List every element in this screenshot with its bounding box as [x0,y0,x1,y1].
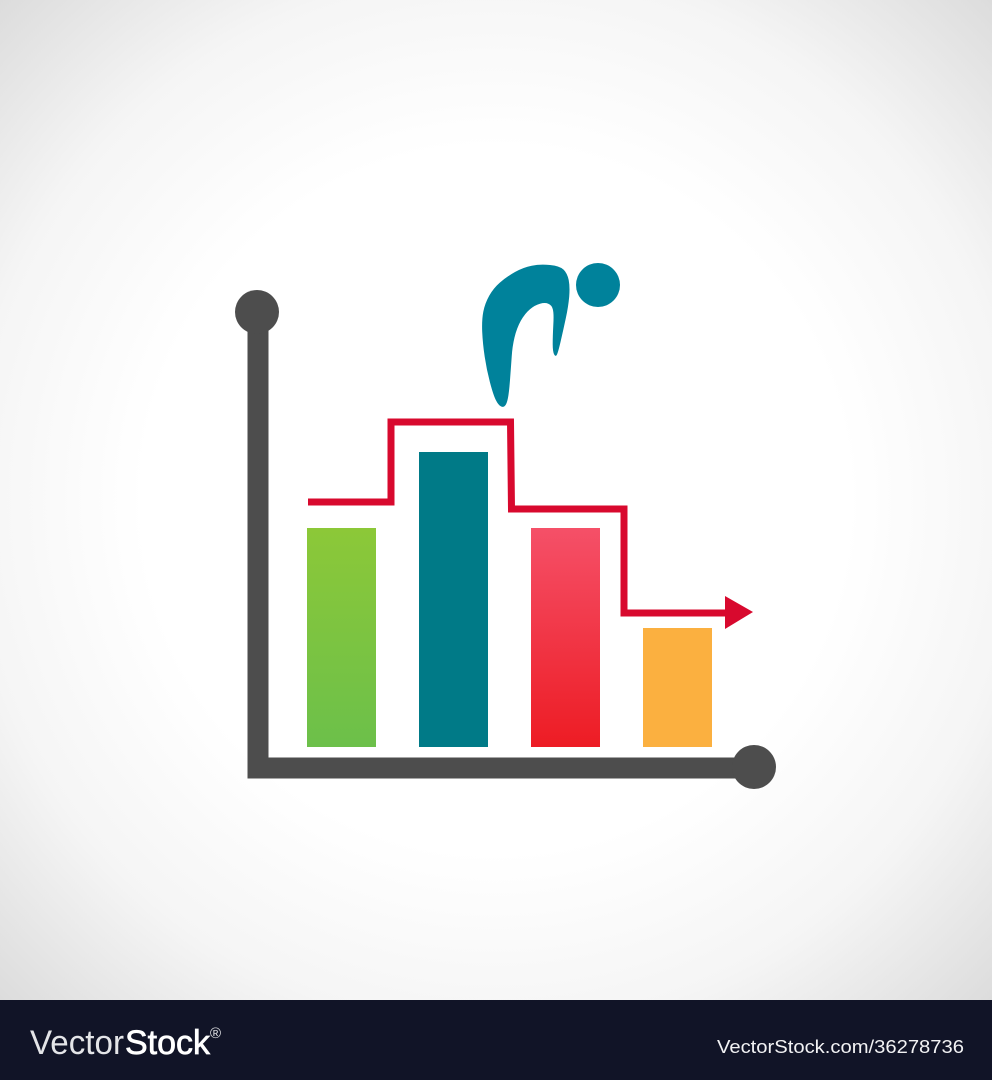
arrow: declining trend line [308,422,753,629]
footer url: VectorStock.com/36278736 [717,1036,964,1057]
icon: bowing person [482,263,620,407]
footer logo: Vector [30,1024,124,1062]
footer logo [30,1024,221,1062]
chart axes [235,290,776,789]
footer bar [0,1000,992,1080]
bar: orange [643,628,712,747]
bar chart [235,290,776,789]
bar: red [531,528,600,747]
footer logo: Stock [125,1024,211,1062]
footer logo: ® [210,1025,221,1042]
bar: green [307,528,376,747]
bar: teal [419,452,488,747]
